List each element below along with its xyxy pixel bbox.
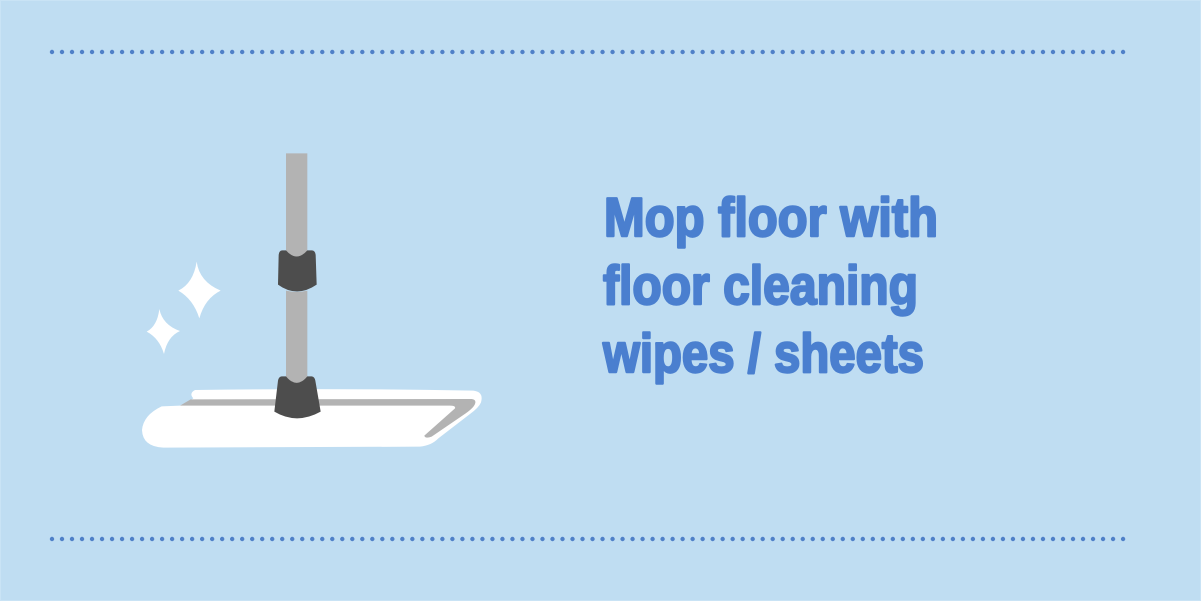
mop handle pole [286, 153, 307, 383]
lower collar [274, 376, 321, 418]
upper collar [278, 250, 317, 291]
icon: large sparkle [178, 262, 221, 318]
heading: Mop floor with [604, 186, 938, 248]
icon: small sparkle [147, 309, 180, 354]
mop pad [142, 389, 482, 448]
top dotted line [52, 50, 1126, 54]
heading: floor cleaning [603, 254, 918, 316]
bottom dotted line [52, 537, 1126, 541]
icon: mop with sparkles [142, 153, 482, 448]
heading: wipes / sheets [602, 322, 924, 384]
heading [602, 186, 938, 384]
